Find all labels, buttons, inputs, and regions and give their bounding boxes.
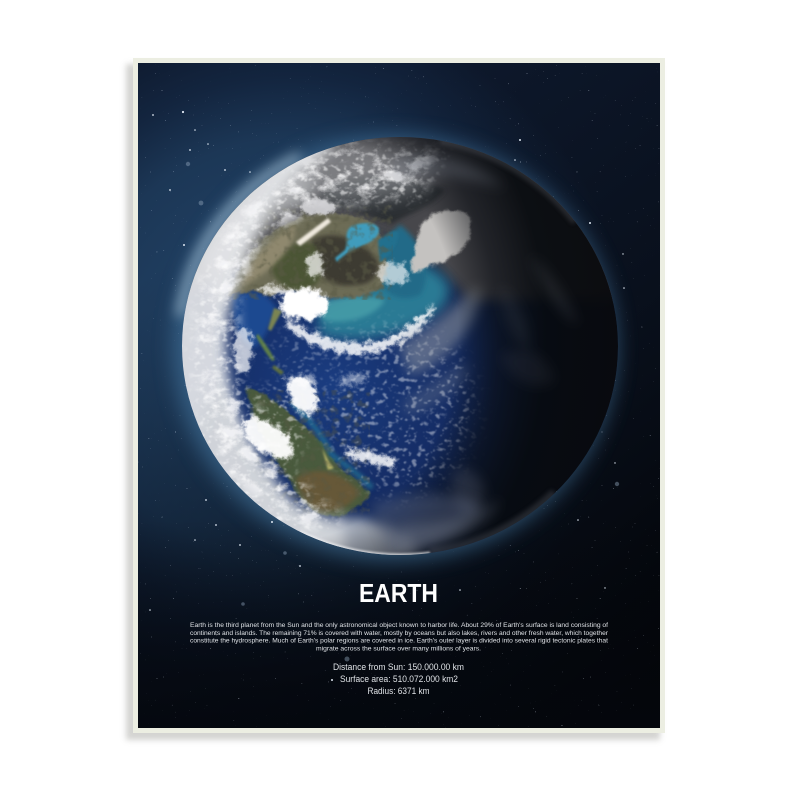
description paragraph: constitute the hydrosphere. Much of Earth's polar regions are covered in ice. Earth's outer layer is divided into several rigid tectonic plates that bbox=[190, 638, 608, 644]
description paragraph bbox=[190, 622, 609, 652]
description paragraph: continents and islands. The remaining 71% is covered with water, mostly by oceans but also lakes, rivers and other fresh water, which together bbox=[190, 630, 609, 637]
night-side shadow bbox=[325, 137, 618, 555]
Canada dark lands bbox=[320, 175, 445, 224]
northern grey cloud haze bbox=[225, 142, 435, 202]
thin cloud streak bbox=[296, 218, 331, 246]
North America land bbox=[228, 213, 386, 298]
faint night clouds bbox=[395, 156, 578, 552]
description paragraph: migrate across the surface over many millions of years. bbox=[316, 646, 481, 652]
southern white cloud mass bbox=[196, 392, 421, 555]
description paragraph: Earth is the third planet from the Sun and the only astronomical object known to harbor life. About 29% of Earth's surface is land consisting of bbox=[190, 622, 608, 629]
title: EARTH bbox=[359, 578, 438, 608]
lit blue-grey lower hemisphere bbox=[370, 494, 480, 552]
upper right rim bbox=[440, 141, 575, 222]
planet Earth bbox=[182, 137, 618, 555]
broad grey cloud band bbox=[400, 285, 481, 375]
frame drop shadow bbox=[126, 64, 660, 740]
planet statistics: Distance from Sun: 150.000.00 km bbox=[333, 662, 464, 672]
poster background: starry space bbox=[138, 63, 660, 728]
Hudson Bay bbox=[335, 223, 379, 262]
ocean base bbox=[182, 137, 576, 553]
fine cloud speckle bbox=[191, 146, 480, 530]
South America bbox=[247, 388, 369, 516]
planet statistics: Radius: 6371 km bbox=[368, 686, 430, 696]
star field bbox=[138, 63, 660, 728]
bright cloud masses bbox=[234, 199, 434, 470]
northern dark landmass base bbox=[192, 137, 613, 304]
upper left grey-white haze bbox=[216, 171, 320, 303]
atmospheric glow bbox=[173, 135, 617, 561]
Gulf of Mexico bbox=[232, 291, 276, 348]
Florida and Caribbean islands bbox=[268, 308, 282, 331]
shallow teal Atlantic shelf bbox=[318, 262, 449, 339]
white left limb crescent bbox=[182, 146, 350, 549]
mottled mid-scale clouds bbox=[194, 139, 440, 531]
planet statistics bbox=[334, 664, 464, 694]
planet statistics: Surface area: 510.072.000 km2 bbox=[340, 674, 458, 684]
poster frame bbox=[133, 58, 665, 733]
land texture bbox=[228, 205, 393, 300]
South America coastal shelf bbox=[292, 402, 372, 488]
lower right rim bbox=[430, 493, 555, 553]
Greenland bbox=[412, 211, 471, 273]
bottom rim light bbox=[300, 532, 430, 555]
